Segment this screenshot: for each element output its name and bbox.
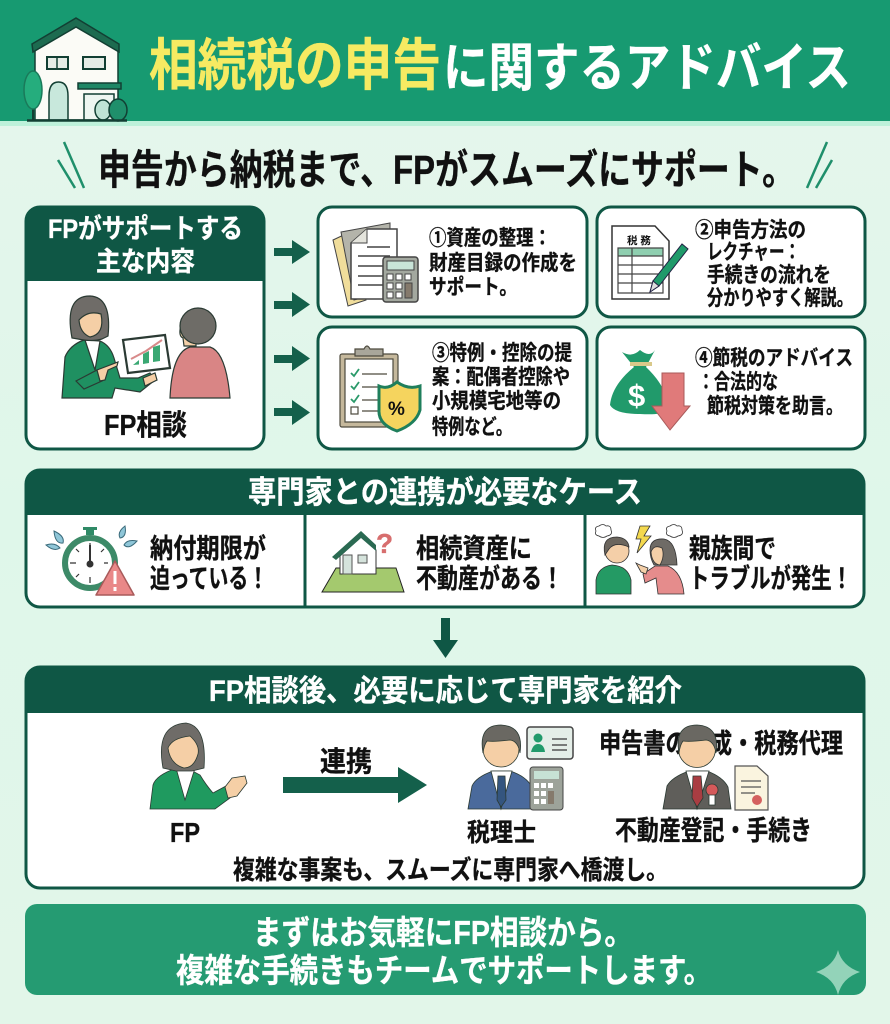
text: card 3: 特例など。 — [432, 416, 512, 439]
call to action: 複雑な手続きもチームでサポートします。 — [176, 952, 712, 989]
icon: clipboard and shield: % — [388, 399, 405, 420]
icon: money bag with down arrow — [610, 350, 690, 430]
text: case 2: 相続資産に — [416, 534, 532, 564]
icon: ID card — [527, 727, 573, 759]
icon: tax accountant — [468, 725, 535, 809]
text: card 4: ：合法的な — [698, 371, 778, 394]
caption: 複雑な事案も、スムーズに専門家へ橋渡し。 — [233, 855, 668, 885]
arrow: collaboration: 連携 — [320, 746, 372, 777]
icon: arguing relatives — [595, 524, 684, 594]
card 1: assets — [318, 207, 587, 317]
icon: FP adviser with tablet and client — [62, 296, 230, 398]
text: card 3: 小規模宅地等の — [432, 390, 561, 413]
icon: sparkle — [816, 950, 860, 995]
case 2: real estate — [322, 528, 563, 594]
text: card 4: ④節税のアドバイス — [695, 347, 853, 370]
text: card 1: ①資産の整理： — [429, 227, 551, 250]
text: card 1: サポート。 — [429, 276, 517, 299]
icon: house on land with question mark — [322, 528, 404, 592]
text: card 2: レクチャー： — [707, 241, 800, 264]
card 3: deductions — [318, 327, 587, 449]
title: 相続税の申告 — [149, 34, 441, 97]
text: card 3 — [432, 342, 572, 439]
icon: documents and calculator — [333, 223, 418, 306]
heading: referral: FP相談後、必要に応じて専門家を紹介 — [209, 675, 682, 708]
icon: stopwatch and warning — [46, 526, 137, 595]
icon: judicial scrivener — [663, 725, 731, 809]
card 2: filing method — [597, 207, 865, 317]
text: card 4: 節税対策を助言。 — [707, 395, 843, 418]
icon: tax form and pen — [612, 226, 688, 299]
arrows to cards — [274, 240, 310, 425]
label: FP: FP — [170, 817, 200, 848]
case 1: deadline — [46, 526, 268, 595]
text: card 1 — [429, 227, 577, 299]
icon: clipboard and shield — [340, 346, 420, 431]
case 3: family trouble — [595, 524, 852, 594]
label: tax accountant: 税理士 — [467, 819, 536, 847]
heading: FP support — [48, 213, 243, 277]
panel: specialist referral — [26, 667, 864, 888]
arrow: collaboration — [283, 746, 427, 803]
title — [149, 34, 851, 98]
text: card 4 — [695, 347, 853, 418]
label: registration procedures: 不動産登記・手続き — [615, 816, 812, 846]
icon: FP person — [150, 723, 247, 809]
call to action: まずはお気軽にFP相談から。 — [253, 914, 633, 951]
text: card 2 — [695, 219, 853, 310]
header band — [0, 0, 890, 126]
text: card 3: 案：配偶者控除や — [432, 366, 570, 389]
call to action — [25, 904, 866, 995]
icon: calculator — [530, 767, 563, 810]
panel: cases needing specialists — [26, 470, 864, 607]
icon: house on land with question mark: ? — [376, 528, 393, 559]
icon: tax form and pen: 税 務 — [627, 234, 651, 247]
text: case 3: 親族間で — [689, 534, 776, 564]
text: case 2: 不動産がある！ — [416, 563, 563, 594]
label: FP相談: FP相談 — [104, 409, 187, 442]
text: card 2: ②申告方法の — [695, 219, 806, 242]
heading: FP support: FPがサポートする — [48, 213, 243, 244]
text: case 1: 迫っている！ — [150, 564, 268, 594]
label: filing and tax agency: 申告書の作成・税務代理 — [599, 729, 843, 759]
card 4: tax saving — [597, 327, 865, 449]
heading: cases: 専門家との連携が必要なケース — [248, 475, 642, 510]
text: card 1: 財産目録の作成を — [429, 251, 577, 275]
text: card 2: 手続きの流れを — [707, 264, 831, 287]
icon: certificate — [735, 766, 768, 810]
panel: FP support — [26, 207, 264, 449]
text: card 3: ③特例・控除の提 — [432, 342, 572, 365]
icon: house — [24, 18, 127, 121]
text: case 3 — [689, 534, 852, 594]
text: case 1 — [150, 533, 268, 594]
text: case 2 — [416, 534, 563, 594]
arrow: down — [433, 618, 458, 658]
icon: money bag with down arrow: $ — [628, 378, 645, 413]
heading: FP support: 主な内容 — [96, 247, 195, 277]
text: case 1: 納付期限が — [150, 533, 266, 564]
